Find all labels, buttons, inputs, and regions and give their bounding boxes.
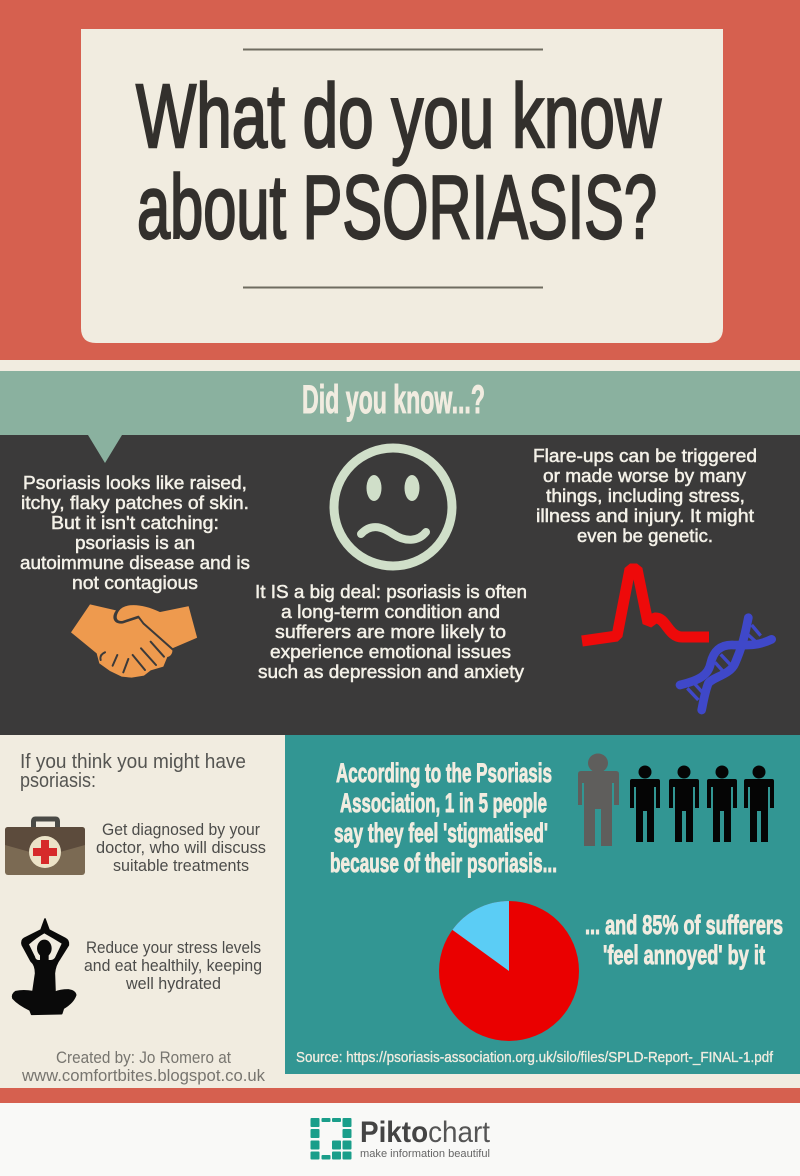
icon: doctor bag <box>5 819 85 875</box>
text block: reduce stress: and eat healthily, keeping <box>84 957 262 975</box>
text block: flare-ups: things, including stress, <box>546 485 745 506</box>
heading: if you think: If you think you might have <box>20 751 246 773</box>
text block: it is a big deal <box>255 581 527 682</box>
text block: what psoriasis looks like: not contagious <box>72 572 198 593</box>
text block: credit <box>21 1048 265 1085</box>
text block: it is a big deal: It IS a big deal: psoriasis is often <box>255 581 527 602</box>
heading: if you think <box>20 751 246 792</box>
icon: piktochart mark <box>310 1118 352 1160</box>
logo: piktochart <box>310 1116 491 1160</box>
text block: stigmatised: because of their psoriasis... <box>330 848 557 878</box>
text block: it is a big deal: experience emotional issues <box>270 641 511 662</box>
text block: credit: Created by: Jo Romero at <box>56 1048 231 1067</box>
text block: flare-ups: Flare-ups can be triggered <box>533 445 757 466</box>
title card <box>81 29 723 343</box>
icon: grey person <box>578 754 619 846</box>
text block: what psoriasis looks like: Psoriasis looks like raised, <box>23 472 247 493</box>
text block: flare-ups: illness and injury. It might <box>536 505 754 526</box>
text block: flare-ups <box>533 445 757 546</box>
panel: did you know <box>0 371 800 735</box>
icon: dna helix <box>680 618 772 710</box>
heading: did you know: Did you know...? <box>302 378 485 422</box>
icon: red pulse line <box>582 569 709 641</box>
panel: title header <box>0 0 800 360</box>
text: tagline: make information beautiful <box>360 1148 490 1160</box>
icon: four black people <box>630 766 774 842</box>
text block: source: Source: https://psoriasis-association.org.uk/silo/files/SPLD-Report-_FINAL-1.pdf <box>296 1050 774 1066</box>
icon: handshake <box>71 604 198 678</box>
panel: advice <box>0 735 800 1088</box>
text block: stigmatised: Association, 1 in 5 people <box>340 788 547 818</box>
text block: get diagnosed: Get diagnosed by your <box>102 821 260 839</box>
panel: statistics <box>285 735 800 1074</box>
text block: get diagnosed: doctor, who will discuss <box>96 839 266 857</box>
text block: stigmatised: According to the Psoriasis <box>336 758 552 788</box>
text block: what psoriasis looks like: psoriasis is an <box>75 532 195 553</box>
text block: what psoriasis looks like: itchy, flaky patches of skin. <box>21 492 249 513</box>
pie chart: 85 percent <box>439 901 579 1041</box>
text block: get diagnosed <box>96 821 266 875</box>
text block: credit: www.comfortbites.blogspot.co.uk <box>21 1066 265 1085</box>
icon: sad face <box>334 448 452 566</box>
text block: stigmatised <box>330 758 557 878</box>
text block: stigmatised: say they feel 'stigmatised' <box>334 818 548 848</box>
text block: it is a big deal: such as depression and anxiety <box>258 661 525 682</box>
text block: it is a big deal: sufferers are more likely to <box>275 621 506 642</box>
text block: it is a big deal: a long-term condition and <box>281 601 500 622</box>
text block: what psoriasis looks like: autoimmune disease and is <box>20 552 250 573</box>
text block: get diagnosed: suitable treatments <box>113 857 249 875</box>
text block: reduce stress: well hydrated <box>125 975 221 993</box>
text block: reduce stress: Reduce your stress levels <box>86 939 261 957</box>
icon: yoga figure <box>13 919 76 1014</box>
title <box>136 67 662 258</box>
text block: flare-ups: or made worse by many <box>543 465 747 486</box>
text block: feel annoyed <box>585 910 783 970</box>
text block: flare-ups: even be genetic. <box>577 525 713 546</box>
text block: what psoriasis looks like <box>20 472 250 593</box>
text block: what psoriasis looks like: But it isn't catching: <box>51 512 219 533</box>
text block: reduce stress <box>84 939 262 993</box>
heading: if you think: psoriasis: <box>20 770 96 792</box>
text: piktochart wordmark: Piktochart <box>360 1116 491 1149</box>
